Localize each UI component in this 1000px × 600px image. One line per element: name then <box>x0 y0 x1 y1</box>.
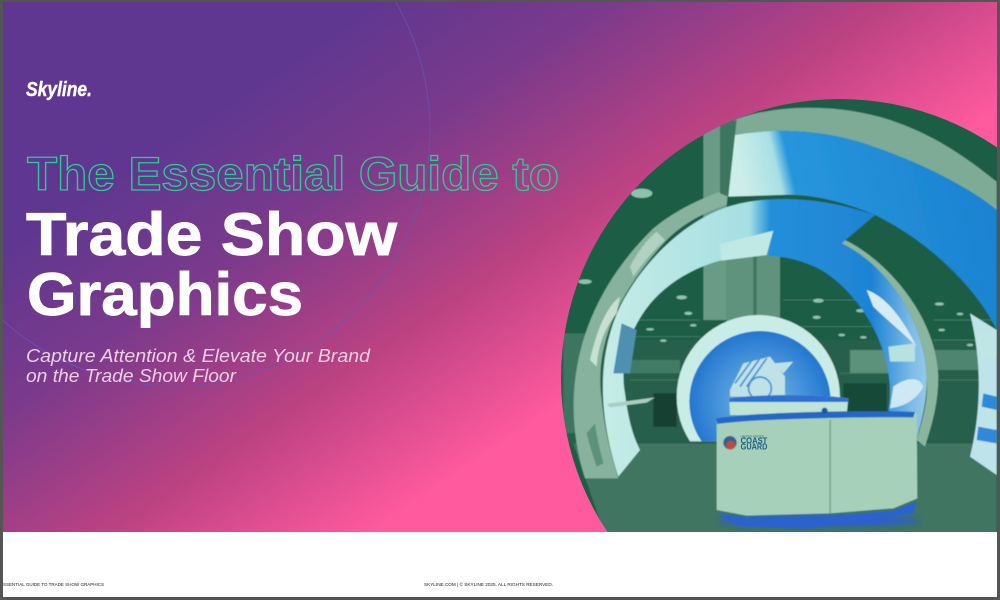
footer left text: ESSENTIAL GUIDE TO TRADE SHOW GRAPHICS <box>0 582 104 587</box>
booth desk logo text: UNITED STATES <box>741 434 764 438</box>
booth desk logo text: COAST <box>741 437 767 446</box>
subtitle: on the Trade Show Floor <box>26 366 237 386</box>
subtitle: Capture Attention & Elevate Your Brand <box>26 346 371 366</box>
footer strip <box>0 532 1000 600</box>
decorative circle outline <box>0 0 430 386</box>
title: outlined line: The Essential Guide to <box>27 147 559 200</box>
title: Trade Show Graphics <box>26 201 397 328</box>
title: Trade Show Graphics: Trade Show <box>26 201 397 268</box>
title: Trade Show Graphics: Graphics <box>27 261 303 328</box>
footer right text: SKYLINE.COM | © SKYLINE 2025. ALL RIGHTS RESERVED. <box>424 581 553 587</box>
photo: trade show booth in circle <box>561 99 997 532</box>
booth desk logo text: GUARD <box>741 443 768 452</box>
subtitle <box>26 346 371 386</box>
logo: Skyline: Skyline. <box>26 79 92 101</box>
booth desk logo text <box>740 436 768 450</box>
